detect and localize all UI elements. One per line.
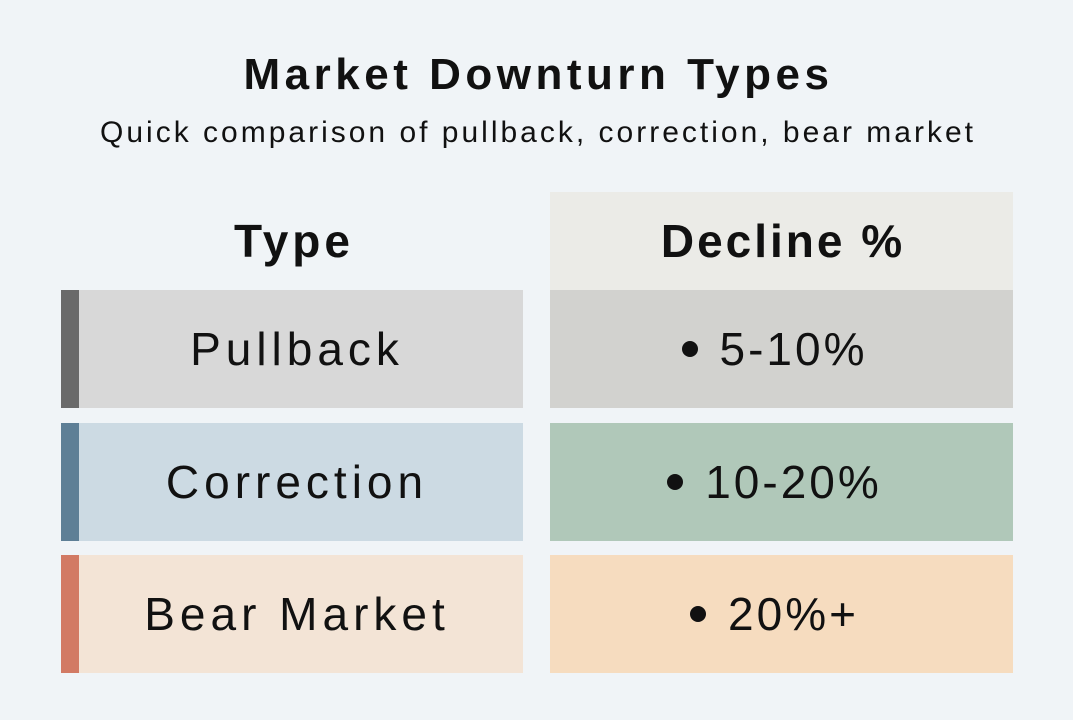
row: correction type: Correction (166, 456, 428, 508)
row: pullback type (61, 290, 523, 408)
row: pullback type: Pullback (190, 323, 404, 375)
title: Market Downturn Types (244, 50, 833, 99)
row: bear decline: 20%+ (728, 588, 859, 640)
header: type: Type (234, 215, 354, 267)
header: decline (550, 192, 1013, 290)
row: correction decline (550, 423, 1013, 541)
row: bear decline (550, 555, 1013, 673)
row: bear type: Bear Market (144, 588, 450, 640)
header: decline: Decline % (661, 215, 905, 267)
row: pullback decline (550, 290, 1013, 408)
subtitle: Quick comparison of pullback, correction, bear market (100, 116, 976, 149)
row: bear type (61, 555, 523, 673)
row: correction type (61, 423, 523, 541)
row: pullback decline: 5-10% (720, 323, 867, 375)
row: correction decline: 10-20% (705, 456, 882, 508)
